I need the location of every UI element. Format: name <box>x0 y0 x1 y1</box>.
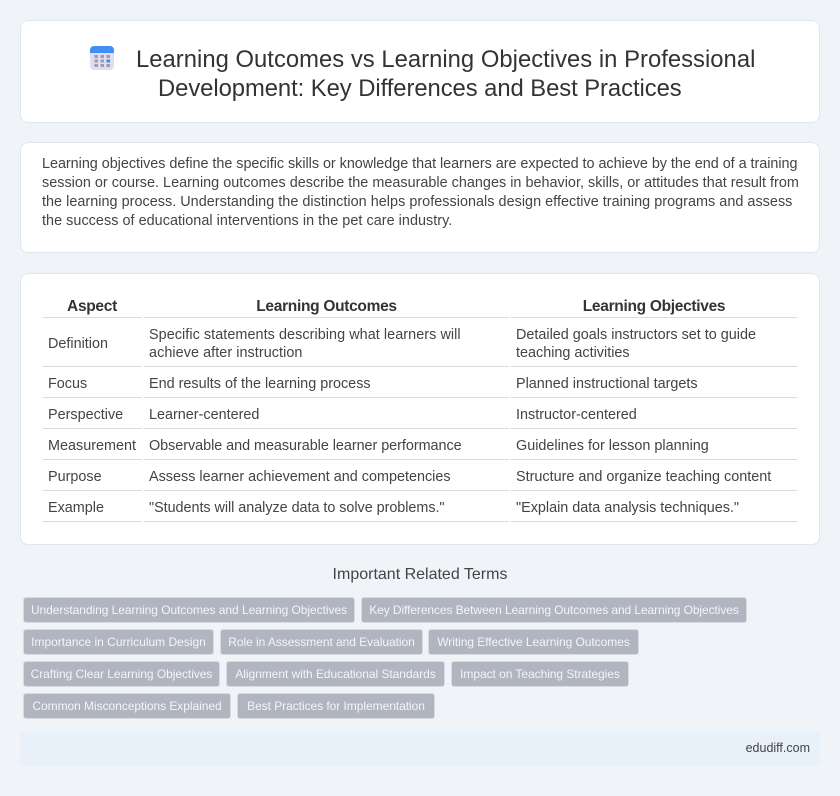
table rows: End results of the learning process <box>149 376 371 392</box>
intro paragraph: the success of educational interventions in the pet care industry. <box>42 213 452 229</box>
footer credit: edudiff.com <box>746 741 810 755</box>
table rows: Focus <box>48 376 87 392</box>
related term tags: Understanding Learning Outcomes and Learning Objectives <box>31 603 347 617</box>
table rows: Definition <box>48 336 108 352</box>
table header: Learning Outcomes <box>256 298 397 315</box>
related terms heading: Important Related Terms <box>333 566 507 583</box>
table rows: Example <box>48 500 104 516</box>
table rows: Instructor-centered <box>516 407 637 423</box>
related term tags: Importance in Curriculum Design <box>31 635 206 649</box>
title: Development: Key Differences and Best Practices <box>158 75 682 102</box>
table rows: "Students will analyze data to solve problems." <box>149 500 445 516</box>
table rows: "Explain data analysis techniques." <box>516 500 739 516</box>
related term tags <box>23 597 747 719</box>
table rows: Structure and organize teaching content <box>516 469 771 485</box>
header panel <box>20 20 820 123</box>
table header: Learning Objectives <box>583 298 725 315</box>
table header <box>43 298 797 318</box>
table rows: teaching activities <box>516 345 630 361</box>
intro paragraph: session or course. Learning outcomes describe the measurable changes in behavior, skills, or attitudes that result from <box>42 175 799 191</box>
table rows: Purpose <box>48 469 102 485</box>
table rows: Learner-centered <box>149 407 259 423</box>
comparison table <box>43 298 797 522</box>
related term tags: Role in Assessment and Evaluation <box>228 635 415 649</box>
related term tags: Common Misconceptions Explained <box>32 699 222 713</box>
table rows: Detailed goals instructors set to guide <box>516 327 756 343</box>
table rows: achieve after instruction <box>149 345 302 361</box>
related term tags: Best Practices for Implementation <box>247 699 425 713</box>
related term tags: Crafting Clear Learning Objectives <box>31 667 212 681</box>
comparison table panel <box>20 273 820 545</box>
table rows: Observable and measurable learner performance <box>149 438 462 454</box>
icon: calendar <box>90 46 114 70</box>
related term tags: Key Differences Between Learning Outcomes and Learning Objectives <box>369 603 739 617</box>
title <box>136 46 755 102</box>
table rows: Perspective <box>48 407 123 423</box>
table rows: Assess learner achievement and competencies <box>149 469 451 485</box>
table header: Aspect <box>67 298 117 315</box>
intro paragraph: Learning objectives define the specific skills or knowledge that learners are expected to achieve by the end of a training <box>42 156 798 172</box>
intro paragraph: the learning process. Understanding the distinction helps professionals design effective training programs and assess <box>42 194 792 210</box>
table rows <box>43 327 797 522</box>
related term tags: Alignment with Educational Standards <box>235 667 436 681</box>
table rows: Measurement <box>48 438 136 454</box>
related term tags: Impact on Teaching Strategies <box>460 667 620 681</box>
table rows: Specific statements describing what learners will <box>149 327 461 343</box>
footer bar <box>20 732 820 766</box>
intro paragraph <box>42 156 799 229</box>
intro text panel <box>20 142 820 253</box>
related term tags: Writing Effective Learning Outcomes <box>437 635 630 649</box>
table rows: Planned instructional targets <box>516 376 698 392</box>
title: Learning Outcomes vs Learning Objectives in Professional <box>136 46 755 73</box>
table rows: Guidelines for lesson planning <box>516 438 709 454</box>
